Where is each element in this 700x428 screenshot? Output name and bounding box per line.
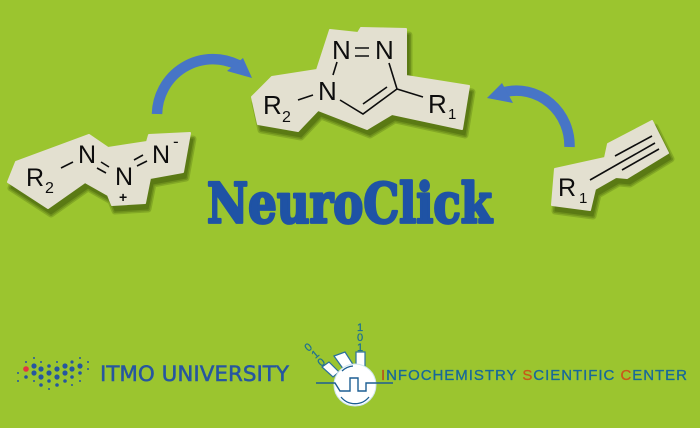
ITMO wordmark: ITMO UNIVERSITY xyxy=(100,362,289,386)
flask body xyxy=(334,364,376,406)
triazole labels xyxy=(263,35,456,126)
alkyne labels: 1 xyxy=(579,190,587,207)
azide labels: N xyxy=(78,141,96,169)
triazole labels: R xyxy=(263,90,282,120)
arrow: alkyne to triazole xyxy=(487,83,570,147)
binary digits: 1 xyxy=(357,322,363,334)
triazole product molecule xyxy=(252,28,472,137)
logo: flask icon xyxy=(302,322,393,406)
triazole labels: 1 xyxy=(448,106,456,123)
baseline and pulse wave xyxy=(316,378,393,391)
binary digits: 0 xyxy=(315,356,328,369)
azide molecule xyxy=(8,132,193,214)
azide backing panel xyxy=(8,133,193,214)
azide labels: R xyxy=(26,164,44,192)
azide labels: 2 xyxy=(45,180,54,197)
binary digits: 0 xyxy=(357,332,363,344)
binary digits: 1 xyxy=(357,342,363,354)
binary digits: 1 xyxy=(309,348,322,361)
triazole labels: N xyxy=(375,35,394,65)
triazole backing panel xyxy=(252,28,472,137)
azide bonds xyxy=(61,155,147,173)
alkyne molecule xyxy=(552,121,671,216)
binary digits: 0 xyxy=(302,341,315,354)
azide labels: + xyxy=(119,189,127,205)
azide labels: N xyxy=(115,163,133,191)
triazole labels: R xyxy=(428,89,447,119)
alkyne backing panel xyxy=(552,121,671,216)
azide labels: - xyxy=(173,132,179,151)
logo: ITMO University xyxy=(17,357,289,390)
triazole bonds xyxy=(298,48,423,114)
title: NeuroClick xyxy=(207,170,494,236)
azide labels xyxy=(26,132,179,205)
alkyne labels xyxy=(558,174,587,207)
azide labels: N xyxy=(152,141,170,169)
flask necks xyxy=(322,352,365,377)
alkyne labels: R xyxy=(558,174,576,202)
binary digits xyxy=(302,322,363,369)
arrow: azide to triazole xyxy=(157,58,252,114)
triazole labels: N xyxy=(318,76,337,106)
ITMO dot mark xyxy=(17,357,89,390)
alkyne bonds xyxy=(590,136,659,180)
logo: Infochemistry Scientific Center wordmark: INFOCHEMISTRY SCIENTIFIC CENTER xyxy=(381,367,687,384)
triazole labels: N xyxy=(332,35,351,65)
triazole labels: 2 xyxy=(282,109,291,126)
flask inner arcs xyxy=(341,366,369,404)
